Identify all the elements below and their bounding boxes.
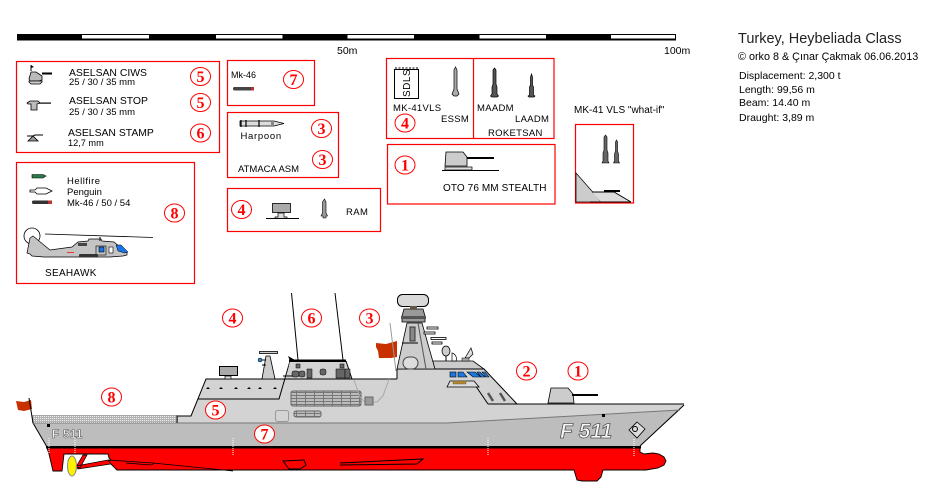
callout 4: 4 bbox=[228, 310, 236, 328]
callout 4 bbox=[222, 309, 242, 328]
icon: CIWS bbox=[29, 65, 52, 84]
panel: OTO 76: OTO 76 MM STEALTH bbox=[443, 183, 547, 194]
mast yards bbox=[424, 327, 446, 344]
mast drum bbox=[402, 309, 425, 322]
label: what-if: MK-41 VLS "what-if" bbox=[574, 105, 665, 116]
radar mast aft bbox=[262, 356, 275, 379]
callout 6 bbox=[302, 309, 322, 328]
bridge bbox=[433, 361, 484, 369]
anchor point bbox=[602, 414, 605, 417]
callout 1: 1 bbox=[574, 364, 582, 380]
gun: OTO 76 bbox=[548, 388, 598, 403]
callout 5 bbox=[190, 68, 210, 86]
curved panel bbox=[354, 379, 389, 402]
icon: SDLS: SDLS bbox=[402, 69, 413, 97]
hull outline bbox=[33, 405, 684, 447]
callout 1 bbox=[395, 156, 415, 174]
specifications bbox=[739, 70, 841, 124]
panel: helicopter: Hellfire bbox=[67, 176, 101, 187]
callout 7: 7 bbox=[260, 426, 268, 444]
RAM launcher on hangar bbox=[220, 366, 238, 379]
panel: what-if VLS bbox=[576, 124, 634, 203]
panel: VLS: ROKETSAN bbox=[488, 128, 543, 139]
icon: STOP bbox=[27, 101, 51, 110]
gun STAMP bbox=[283, 375, 293, 377]
callout 8: 8 bbox=[170, 206, 178, 222]
icon: Harpoon bbox=[240, 120, 284, 127]
panel: RAM bbox=[228, 188, 380, 232]
icon: RAM launcher bbox=[266, 204, 299, 219]
panel: guns: ASELSAN STAMP bbox=[68, 128, 154, 139]
callout 7: 7 bbox=[290, 72, 298, 89]
panel: Mk-46: Mk-46 bbox=[231, 70, 256, 80]
panel: guns: ASELSAN CIWS bbox=[69, 68, 147, 79]
vent bbox=[291, 391, 361, 406]
hangar superstructure bbox=[177, 379, 287, 423]
flag: mast bbox=[376, 341, 397, 358]
icon: ESSM missile bbox=[452, 67, 459, 96]
callout 2 bbox=[516, 362, 536, 380]
icon: OTO gun bbox=[442, 152, 499, 171]
panel: guns: ASELSAN STOP bbox=[69, 96, 148, 107]
callout 4 bbox=[395, 114, 415, 132]
callout 3: 3 bbox=[366, 310, 374, 328]
callout 5: 5 bbox=[212, 402, 220, 420]
vent small bbox=[294, 411, 321, 417]
propeller struts bbox=[76, 455, 111, 469]
bridge console bbox=[447, 381, 479, 387]
callout 4 bbox=[232, 200, 252, 219]
icon: Seahawk helicopter bbox=[24, 228, 153, 258]
propeller bbox=[68, 456, 76, 476]
callout 1 bbox=[568, 362, 588, 380]
callout 6: 6 bbox=[196, 126, 204, 142]
radomes on bridge bbox=[445, 354, 447, 361]
aft whip antennas bbox=[292, 293, 343, 360]
flag: stern bbox=[16, 400, 32, 411]
panel: Mk-46 bbox=[228, 60, 314, 106]
panel: helicopter: SEAHAWK bbox=[45, 268, 97, 279]
specifications: Length: 99,56 m bbox=[739, 84, 815, 96]
forward block bbox=[286, 361, 352, 379]
icon: SDLS bbox=[394, 68, 419, 98]
callout 7 bbox=[254, 425, 274, 444]
panel: guns: 25 / 30 / 35 mm bbox=[69, 107, 135, 118]
mast radome bbox=[398, 294, 428, 306]
callout 1: 1 bbox=[401, 158, 409, 174]
ship number: stern: F 511 bbox=[52, 429, 83, 441]
ship number: bow: F 511 bbox=[560, 420, 612, 443]
callout 3: 3 bbox=[318, 121, 326, 138]
icon: MAADM missile bbox=[490, 68, 498, 97]
title: Turkey, Heybeliada Class bbox=[738, 31, 902, 47]
hatch bbox=[276, 410, 288, 422]
panel: OTO 76 bbox=[388, 144, 555, 204]
panel: guns: 25 / 30 / 35 mm bbox=[69, 77, 135, 88]
panel: VLS: ESSM bbox=[441, 114, 469, 125]
callout 8: 8 bbox=[108, 390, 116, 406]
icon: Hellfire bbox=[32, 174, 46, 178]
main mast bbox=[397, 323, 435, 369]
callout 5 bbox=[206, 401, 226, 420]
panel: helicopter: Mk-46 / 50 / 54 bbox=[67, 198, 130, 209]
sonar shape bbox=[283, 460, 306, 469]
scale bar bbox=[17, 34, 691, 57]
icon: torpedo bbox=[233, 87, 254, 90]
callout 5: 5 bbox=[196, 69, 204, 86]
ship profile bbox=[16, 293, 684, 481]
callout 8 bbox=[164, 204, 184, 222]
scale bar: 100m bbox=[664, 45, 691, 57]
small marks bbox=[206, 387, 277, 389]
icon: missile bbox=[602, 135, 609, 163]
callout 4: 4 bbox=[238, 202, 246, 219]
hull lines bbox=[108, 460, 233, 471]
panel: helicopter: Penguin bbox=[67, 187, 102, 198]
panel: VLS: LAADM bbox=[515, 114, 549, 125]
panel: VLS: MK-41VLS bbox=[393, 103, 441, 114]
panel: helicopter bbox=[16, 162, 194, 284]
deck launcher marks bbox=[488, 393, 505, 401]
credit line: © orko 8 & Çınar Çakmak 06.06.2013 bbox=[738, 51, 918, 63]
panel: RAM: RAM bbox=[346, 207, 368, 218]
callout 6 bbox=[190, 124, 210, 142]
frame ticks bbox=[49, 438, 634, 457]
callout 8 bbox=[102, 388, 122, 406]
icon: STAMP bbox=[27, 135, 43, 141]
scale bar: 50m bbox=[337, 45, 358, 57]
panel: guns: 12,7 mm bbox=[68, 138, 104, 148]
specifications: Displacement: 2,300 t bbox=[739, 70, 841, 82]
panel: VLS bbox=[386, 58, 554, 139]
bow emblem bbox=[629, 422, 645, 438]
icon: missile bbox=[614, 140, 620, 163]
lower hull bbox=[33, 410, 680, 446]
bridge windows bbox=[450, 372, 489, 377]
panel: anti-ship missiles bbox=[228, 112, 338, 178]
red underwater hull bbox=[47, 448, 666, 481]
specifications: Beam: 14.40 m bbox=[739, 97, 810, 109]
specifications: Draught: 3,89 m bbox=[739, 112, 815, 124]
panel: anti-ship missiles: ATMACA ASM bbox=[238, 164, 299, 175]
callout 5 bbox=[190, 94, 210, 112]
panel: VLS: MAADM bbox=[477, 103, 514, 114]
aft deck grid bbox=[32, 416, 178, 423]
panel: guns bbox=[16, 62, 220, 152]
callout 3: 3 bbox=[318, 152, 326, 169]
callout 6: 6 bbox=[308, 310, 316, 328]
callout 4: 4 bbox=[401, 116, 409, 132]
icon: RAM missile bbox=[321, 199, 328, 218]
panel: anti-ship missiles: Harpoon bbox=[240, 131, 282, 142]
equipment bbox=[292, 364, 350, 378]
icon: Penguin bbox=[30, 188, 52, 194]
upper hull band bbox=[177, 369, 684, 423]
callout 5: 5 bbox=[196, 95, 204, 112]
icon: LAADM missile bbox=[528, 74, 535, 97]
callout 3 bbox=[360, 309, 380, 328]
icon: Mk-46 torpedo bbox=[32, 200, 52, 204]
callout 2: 2 bbox=[522, 364, 530, 380]
